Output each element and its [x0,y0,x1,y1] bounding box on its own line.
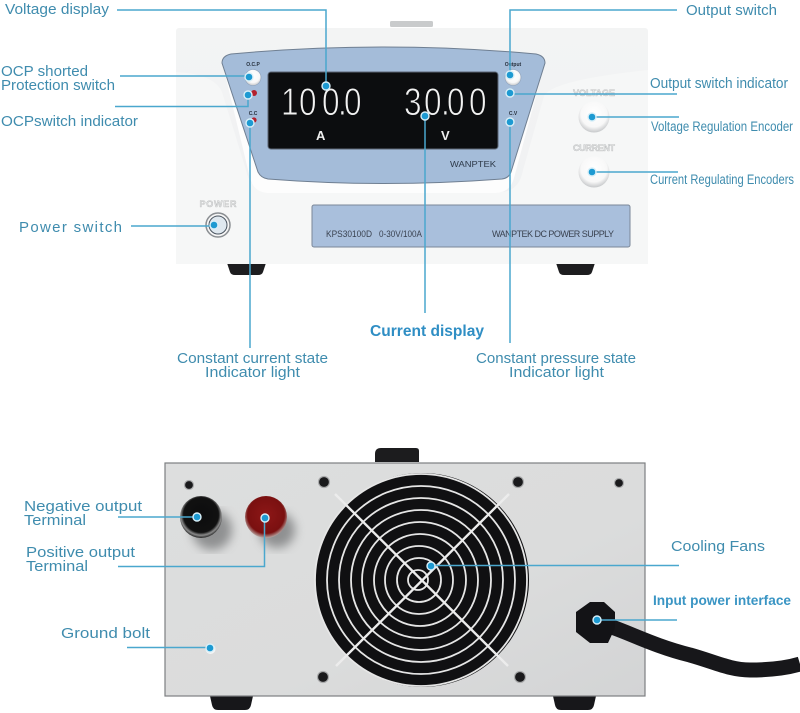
label: constant current state indicator light: Indicator light [205,364,301,381]
black display [268,72,498,149]
plate title: WANPTEK DC POWER SUPPLY [492,229,614,239]
model plate [312,205,630,247]
label: ground bolt: Ground bolt [61,625,151,642]
front feet [227,263,595,275]
panel tags: C.C [249,111,258,117]
rear case [165,463,645,696]
voltage encoder label: VOLTAGE [573,88,615,98]
panel tags: Output [505,62,522,68]
leader dots [193,71,601,652]
label: constant pressure state indicator light: Constant pressure state [476,350,636,367]
blue display panel [222,47,545,184]
leader line: OCP switch [120,75,249,77]
rear feet [210,696,596,710]
label: negative output terminal: Terminal [24,512,86,529]
leader line: negative terminal [118,516,197,518]
case recess contour [176,70,648,264]
OCP button [245,70,261,86]
panel tags: O.C.P [246,62,260,68]
label: positive output terminal [26,544,136,575]
label: constant current state indicator light [177,350,328,381]
rear view of power supply [165,448,800,710]
leader line: current display [424,116,426,313]
label: negative output terminal: Negative output [24,498,143,515]
model rating: 0-30V/100A [379,229,422,239]
label: OCP shorted protection switch: OCP shorted [1,63,88,80]
current encoder knob [578,156,610,188]
cable gland [576,602,615,643]
unit V: V [441,128,450,143]
leader line: current encoder [592,171,678,173]
leader line: output indicator [510,93,677,95]
brand logo: WANPTEK [450,160,497,169]
leader line: constant voltage [509,122,511,343]
model number: KPS30100D [326,229,372,239]
voltage readout: 30.00 [404,81,487,124]
top handle [390,21,433,27]
leader line: output switch [510,10,677,75]
front case [176,28,648,264]
leader line: cooling fan [431,564,679,566]
panel tags [246,62,522,117]
label: positive output terminal: Terminal [26,558,88,575]
leader line: positive terminal [118,518,264,566]
label: OCP shorted protection switch [1,63,115,94]
label: OCP shorted protection switch: Protection switch [1,77,115,94]
power label: POWER [200,199,237,209]
voltage encoder knob [578,102,610,132]
leader line: input power [597,619,677,621]
output button [505,70,521,86]
label: output switch: Output switch [686,2,777,19]
front view of power supply [176,21,648,275]
label: positive output terminal: Positive output [26,544,136,561]
label: output switch indicator: Output switch indicator [650,75,788,92]
leader line: OCP indicator [115,95,248,106]
white lip around display panel [224,70,543,193]
positive terminal [245,496,287,538]
power cable [597,622,800,670]
current encoder label: CURRENT [573,143,616,153]
power button [206,213,230,237]
unit A: A [316,128,326,143]
label: negative output terminal [24,498,143,529]
terminal shadows [192,510,295,550]
label: constant pressure state indicator light: Indicator light [509,364,605,381]
panel tags: C.V [509,111,518,117]
label: constant pressure state indicator light [476,350,636,381]
label: constant current state indicator light: Constant current state [177,350,328,367]
leader line: ground bolt [127,646,210,648]
negative terminal [180,496,222,538]
cooling fan [315,473,529,687]
leader line: voltage encoder [592,116,679,118]
rear handle [375,448,419,462]
label: power switch: Power switch [19,219,122,236]
label: voltage display: Voltage display [5,1,110,18]
screws [184,476,624,682]
red indicators [251,90,257,123]
leader line: power switch [131,225,214,227]
leader line: voltage display [117,10,326,86]
ground bolt [206,644,216,654]
label: input power interface: Input power interface [653,592,791,608]
leader line: constant current [249,123,251,348]
label: current display: Current display [370,323,484,340]
current readout: 100.0 [281,81,362,124]
label: cooling fans: Cooling Fans [671,538,765,555]
label: OCP switch indicator: OCPswitch indicator [1,113,138,130]
